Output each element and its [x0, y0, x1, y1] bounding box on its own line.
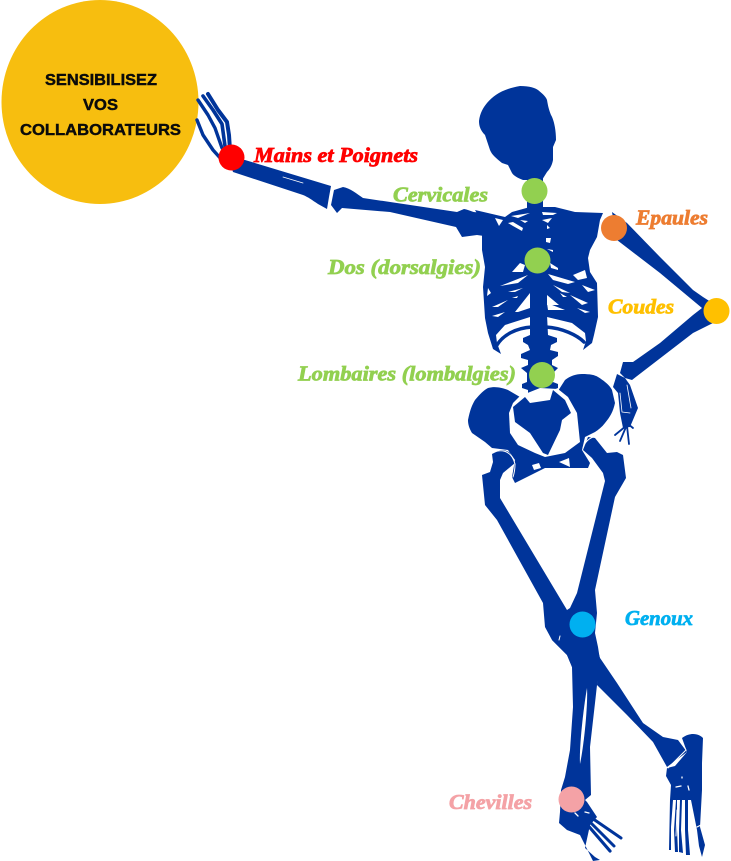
marker: lombaires — [529, 362, 555, 388]
label: dos: Dos (dorsalgies) — [327, 255, 481, 279]
upper arm — [331, 187, 484, 237]
label: chevilles: Chevilles — [449, 790, 532, 814]
callout circle: sensibilisez vos collaborateurs: VOS — [83, 97, 118, 114]
marker: genoux — [570, 612, 596, 638]
label: coudes: Coudes — [608, 294, 674, 318]
skeleton illustration — [197, 86, 725, 861]
spine — [521, 315, 558, 405]
label: epaules: Epaules — [635, 206, 708, 230]
callout circle: sensibilisez vos collaborateurs: SENSIBILISEZ — [45, 72, 157, 89]
raised hand — [197, 94, 230, 160]
right hand — [613, 374, 638, 428]
sacrum — [513, 390, 571, 455]
skull — [479, 86, 556, 180]
rib cage — [475, 207, 603, 354]
marker: chevilles — [558, 786, 584, 812]
marker: dos — [524, 248, 550, 274]
femurs — [482, 437, 626, 667]
neck — [527, 176, 543, 210]
left lower leg — [552, 640, 600, 861]
callout circle: sensibilisez vos collaborateurs: COLLABORATEURS — [20, 122, 181, 139]
toes — [585, 814, 621, 851]
crossing foot — [666, 734, 705, 857]
forearm — [229, 160, 331, 209]
spine over rib gap — [530, 312, 547, 335]
crossing lower leg — [597, 655, 687, 767]
marker: coudes — [704, 298, 730, 324]
right arm — [612, 212, 725, 380]
marker: epaules — [601, 215, 627, 241]
pelvis — [468, 374, 615, 483]
lower ribs — [497, 327, 584, 345]
bone gaps — [487, 212, 595, 764]
label: cervicales: Cervicales — [393, 182, 488, 206]
callout circle: sensibilisez vos collaborateurs — [2, 0, 198, 204]
label: mains et poignets: Mains et Poignets — [253, 143, 418, 167]
joint lines — [283, 177, 703, 838]
label: genoux: Genoux — [625, 606, 693, 630]
label: lombaires: Lombaires (lombalgies) — [297, 362, 516, 386]
marker: mains et poignets — [218, 144, 244, 170]
marker: cervicales — [522, 178, 548, 204]
